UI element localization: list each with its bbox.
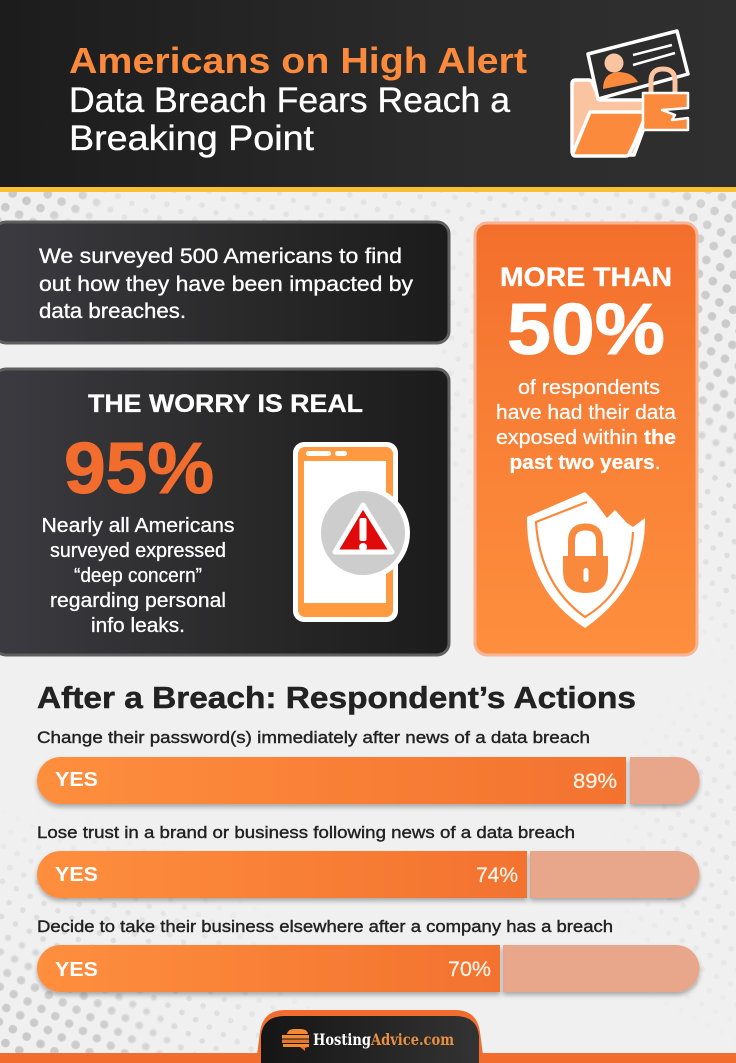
statistic: 95%: 95%: [64, 429, 214, 509]
exposure description: exposed within the: [496, 427, 676, 449]
bar row: lose trust 74%: Lose trust in a brand or business following news of a data breach: [37, 823, 575, 842]
bar row: lose trust 74%: YES: [55, 864, 98, 886]
intro text: We surveyed 500 Americans to find: [39, 244, 402, 268]
bar row: lose trust 74%: [37, 823, 699, 898]
logo: HostingAdvice.com: HostingAdvice.com: [313, 1030, 454, 1049]
exposure description: [496, 377, 677, 474]
intro text: data breaches.: [39, 299, 186, 323]
concern description: surveyed expressed: [50, 540, 226, 562]
bar row: change password 89%: 89%: [573, 770, 617, 793]
icon: folder, ID card and broken padlock: [572, 31, 688, 156]
bar chart: respondent actions: [37, 728, 699, 992]
panel heading: MORE THAN: [500, 262, 672, 292]
exposure description: past two years .: [510, 452, 660, 474]
concern description: Nearly all Americans: [42, 515, 234, 537]
logo: HostingAdvice.com: [282, 1029, 454, 1051]
exposure description: have had their data: [496, 402, 677, 424]
header band: [0, 0, 736, 192]
panel: the worry is real: [0, 369, 449, 655]
section heading: After a Breach: Respondent’s Actions: [37, 680, 636, 715]
bar row: change password 89%: YES: [55, 769, 98, 791]
bar row: change password 89%: Change their password(s) immediately after news of a data breach: [37, 728, 590, 747]
title: Americans on High Alert: [69, 40, 527, 81]
statistic: 50%: 50%: [507, 290, 665, 370]
intro text: [39, 244, 413, 323]
bar row: lose trust 74%: 74%: [476, 864, 518, 887]
intro text: out how they have been impacted by: [39, 272, 413, 296]
concern description: info leaks.: [91, 615, 185, 637]
bar row: take business elsewhere 70%: [37, 917, 699, 992]
bar row: take business elsewhere 70%: 70%: [448, 958, 491, 981]
title: Breaking Point: [69, 119, 314, 158]
bar row: take business elsewhere 70%: Decide to take their business elsewhere after a company has a breach: [37, 917, 613, 936]
bar row: take business elsewhere 70%: YES: [55, 959, 98, 981]
concern description: “deep concern”: [74, 565, 202, 587]
icon: cracked shield with padlock: [527, 492, 645, 628]
panel heading: THE WORRY IS REAL: [88, 390, 363, 418]
panel: more than 50%: [475, 223, 697, 655]
bar row: change password 89%: [37, 728, 699, 804]
title: Data Breach Fears Reach a: [69, 81, 511, 120]
exposure description: of respondents: [518, 377, 660, 399]
concern description: [42, 515, 234, 637]
footer: [0, 1010, 736, 1063]
title: [69, 40, 527, 158]
panel: survey intro: [0, 222, 449, 343]
icon: phone with warning: [293, 442, 410, 622]
concern description: regarding personal: [50, 590, 226, 612]
